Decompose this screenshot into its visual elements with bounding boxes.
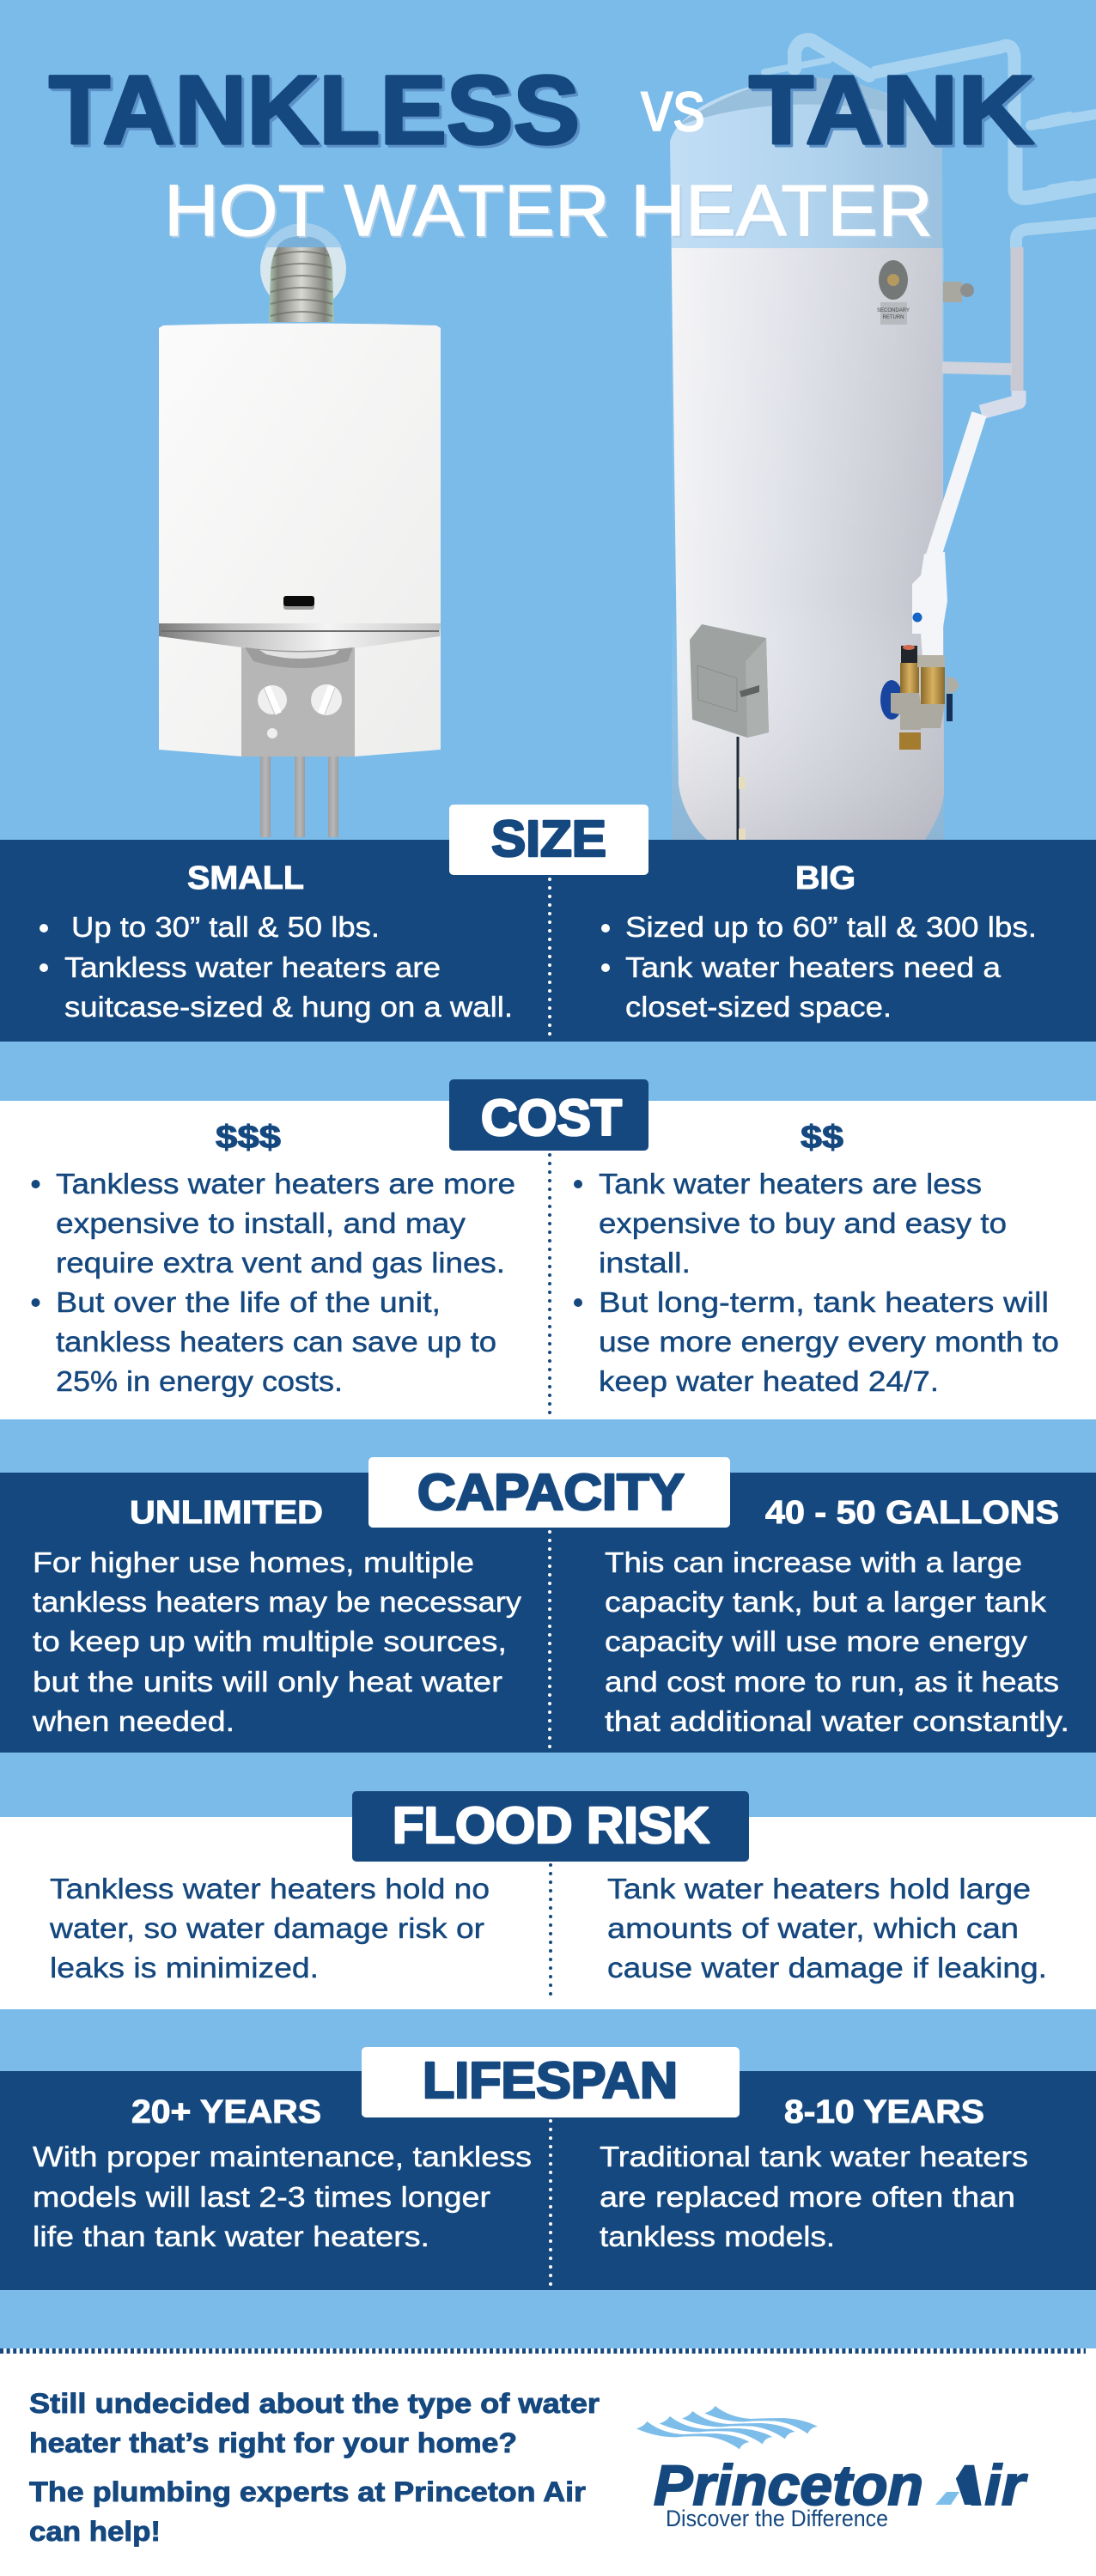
column: tankless capacity xyxy=(32,1495,522,1737)
icon: tank water heater xyxy=(670,40,1096,840)
column: tank capacity: and cost more to run, as it heats xyxy=(605,1666,1059,1698)
column: tank cost: $$ xyxy=(801,1120,843,1156)
column: tankless size: Tankless water heaters are xyxy=(64,951,441,983)
subtitle: Hot Water Heater: HOT WATER HEATER xyxy=(166,172,935,252)
title: Tankless vs Tank xyxy=(49,56,1037,167)
column: tankless flood risk: leaks is minimized. xyxy=(50,1952,319,1984)
column: tankless cost xyxy=(31,1120,515,1397)
column: tank size: Sized up to 60” tall & 300 lbs. xyxy=(625,911,1037,943)
column: tank capacity: 40 - 50 GALLONS xyxy=(765,1495,1059,1531)
column: tankless cost: Tankless water heaters are more xyxy=(56,1168,515,1200)
column: tank lifespan: 8-10 YEARS xyxy=(784,2094,984,2130)
heading: capacity: CAPACITY xyxy=(417,1464,685,1521)
title: Tankless vs Tank: TANK xyxy=(749,56,1034,164)
column: tank cost: keep water heated 24/7. xyxy=(599,1365,939,1397)
column: tank capacity: capacity tank, but a larger tank xyxy=(605,1586,1047,1618)
heading: size: SIZE xyxy=(491,811,606,867)
column: tankless lifespan: With proper maintenance, tankless xyxy=(33,2141,532,2172)
column: tank lifespan: are replaced more often than xyxy=(600,2181,1015,2213)
column: tankless lifespan: life than tank water heaters. xyxy=(33,2221,429,2252)
logo: Princeton Air: Princeton xyxy=(654,2453,923,2517)
column: tank cost: use more energy every month to xyxy=(599,1326,1059,1358)
column: tankless lifespan xyxy=(33,2094,532,2252)
column: tank capacity: that additional water constantly. xyxy=(605,1705,1069,1737)
column: tankless capacity: tankless heaters may be necessary xyxy=(33,1586,522,1618)
call to action text: The plumbing experts at Princeton Air xyxy=(29,2476,586,2507)
heading: flood risk xyxy=(352,1791,749,1862)
title: Tankless vs Tank: vs xyxy=(641,65,705,146)
subtitle: Hot Water Heater: HOT WATER HEATER xyxy=(164,170,933,251)
column: tank cost: Tank water heaters are less xyxy=(599,1168,982,1200)
column: tank flood risk: amounts of water, which can xyxy=(607,1912,1019,1944)
heading: cost xyxy=(449,1079,648,1151)
column: tank lifespan: Traditional tank water heaters xyxy=(600,2141,1028,2172)
column: tank capacity: This can increase with a large xyxy=(605,1546,1022,1578)
column: tank cost xyxy=(574,1120,1059,1397)
call to action text: Still undecided about the type of water xyxy=(29,2388,600,2419)
panel: size xyxy=(0,805,1096,1042)
logo: Princeton Air xyxy=(636,2406,1028,2531)
panel: capacity xyxy=(0,1457,1096,1753)
column: tankless cost: $$$ xyxy=(216,1120,281,1156)
title: Tankless vs Tank: TANK xyxy=(752,58,1037,167)
panel: cost xyxy=(0,1079,1096,1419)
column: tankless capacity: when needed. xyxy=(32,1705,234,1737)
column: tankless size: suitcase-sized & hung on a wall. xyxy=(64,991,513,1023)
column: tank lifespan: tankless models. xyxy=(600,2221,835,2252)
heading: flood risk: FLOOD RISK xyxy=(393,1797,709,1854)
column: tankless cost: 25% in energy costs. xyxy=(56,1365,343,1397)
column: tank capacity: capacity will use more energy xyxy=(605,1625,1028,1657)
column: tankless flood risk: water, so water damage risk or xyxy=(49,1912,484,1944)
title: Tankless vs Tank: TANKLESS xyxy=(52,58,582,167)
call to action text: heater that’s right for your home? xyxy=(29,2427,517,2458)
column: tankless capacity: UNLIMITED xyxy=(130,1495,323,1531)
call to action text xyxy=(29,2388,600,2547)
column: tank flood risk xyxy=(607,1873,1047,1984)
heading: lifespan xyxy=(362,2047,740,2117)
column: tankless lifespan: 20+ YEARS xyxy=(131,2094,321,2130)
column: tank cost: expensive to buy and easy to xyxy=(599,1207,1007,1239)
heading: lifespan: LIFESPAN xyxy=(423,2052,678,2109)
column: tank size: Tank water heaters need a xyxy=(625,951,1002,983)
column: tankless capacity: For higher use homes, multiple xyxy=(33,1546,474,1578)
logo: Princeton Air: Discover the Difference xyxy=(666,2506,888,2531)
column: tankless size: Up to 30” tall & 50 lbs. xyxy=(71,911,380,943)
column: tankless flood risk: Tankless water heaters hold no xyxy=(50,1873,490,1905)
column: tankless flood risk xyxy=(49,1873,490,1984)
column: tank flood risk: cause water damage if leaking. xyxy=(607,1952,1047,1984)
column: tankless size xyxy=(40,860,513,1023)
call to action text: can help! xyxy=(29,2516,161,2547)
heading: size xyxy=(449,805,648,875)
column: tankless capacity: but the units will only heat water xyxy=(33,1666,502,1698)
column: tankless cost: expensive to install, and may xyxy=(56,1207,466,1239)
column: tankless cost: require extra vent and gas lines. xyxy=(56,1247,505,1279)
footer panel xyxy=(0,2348,1096,2576)
column: tank size xyxy=(601,860,1037,1023)
column: tankless cost: But over the life of the unit, xyxy=(56,1286,441,1318)
column: tank cost: install. xyxy=(599,1247,691,1279)
column: tankless cost: tankless heaters can save up to xyxy=(56,1326,496,1358)
column: tank size: closet-sized space. xyxy=(625,991,892,1023)
heading: capacity xyxy=(368,1457,730,1528)
column: tank flood risk: Tank water heaters hold large xyxy=(607,1873,1031,1905)
icon: tank water heater: RETURN xyxy=(883,315,904,320)
panel: lifespan xyxy=(0,2047,1096,2290)
column: tankless lifespan: models will last 2-3 times longer xyxy=(33,2181,490,2213)
column: tank lifespan xyxy=(600,2094,1028,2252)
column: tank cost: But long-term, tank heaters will xyxy=(599,1286,1049,1318)
column: tankless size: SMALL xyxy=(187,860,304,896)
panel: flood risk xyxy=(0,1791,1096,2009)
icon: tankless water heater xyxy=(159,223,441,837)
column: tank capacity xyxy=(605,1495,1069,1737)
heading: cost: COST xyxy=(481,1090,622,1146)
title: Tankless vs Tank: TANKLESS xyxy=(49,56,580,164)
icon: tank water heater: SECONDARY xyxy=(877,308,910,313)
column: tankless capacity: to keep up with multiple sources, xyxy=(33,1625,507,1657)
logo: Princeton Air: Air xyxy=(940,2453,1028,2517)
column: tank size: BIG xyxy=(795,860,855,896)
